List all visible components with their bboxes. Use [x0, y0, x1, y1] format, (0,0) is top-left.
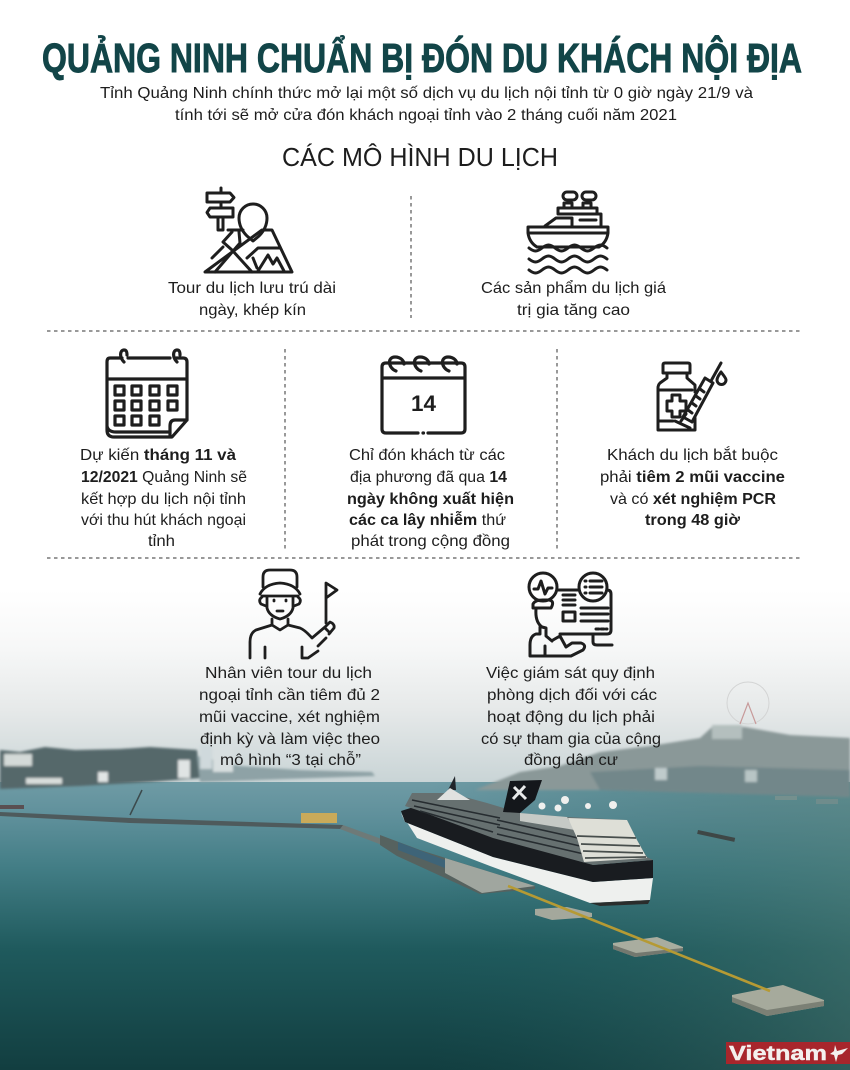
section heading: CÁC MÔ HÌNH DU LỊCH [282, 142, 558, 172]
text: high value products: trị gia tăng cao [517, 302, 630, 319]
dock [380, 835, 535, 894]
subtitle: Tỉnh Quảng Ninh chính thức mở lại một số dịch vụ du lịch nội tỉnh từ 0 giờ ngày 21/9 và [100, 85, 753, 102]
text: monitoring: có sự tham gia của cộng [481, 731, 661, 748]
text: tour staff: mũi vaccine, xét nghiệm [199, 709, 380, 726]
text: high value products [481, 279, 666, 319]
text: long-stay tour: Tour du lịch lưu trú dài [168, 280, 336, 297]
left pier [0, 812, 343, 829]
text: tour staff: định kỳ và làm việc theo [200, 731, 380, 748]
text: tour staff [199, 665, 380, 769]
text: 14 days condition: phát trong cộng đồng [351, 533, 510, 550]
text: 14 days condition: Chỉ đón khách từ các [349, 447, 505, 464]
text: 14 days condition: ngày không xuất hiện [347, 491, 514, 508]
text: long-stay tour: ngày, khép kín [199, 302, 306, 319]
panel: tour staff [199, 570, 380, 769]
text: November and December plan [80, 447, 247, 550]
text: vaccine requirement: phải tiêm 2 mũi vaccine [600, 469, 785, 486]
text: 14 days condition: các ca lây nhiễm thứ [349, 510, 506, 529]
logo: Vietnam+: Vietnam [729, 1043, 827, 1065]
text: November and December plan: với thu hút khách ngoại [81, 512, 246, 529]
panel: vaccine requirement [600, 363, 785, 529]
icon: vaccine bottle and syringe [658, 363, 726, 430]
text: monitoring: Việc giám sát quy định [486, 665, 655, 682]
icon: cruise ship on waves [528, 192, 608, 273]
text: November and December plan: tỉnh [148, 533, 175, 550]
subtitle: tính tới sẽ mở cửa đón khách ngoại tỉnh vào 2 tháng cuối năm 2021 [175, 107, 677, 124]
panel: 14 days condition [347, 357, 514, 550]
panel: November and December plan [80, 350, 247, 550]
panel: monitoring [481, 573, 661, 769]
text: vaccine requirement: và có xét nghiệm PCR [610, 491, 776, 508]
text: November and December plan: Dự kiến tháng 11 và [80, 447, 236, 464]
text: tour staff: mô hình “3 tại chỗ” [220, 750, 361, 769]
ship hull [401, 813, 653, 903]
panel: long-stay tour [168, 188, 336, 319]
text: 14 days condition [347, 447, 514, 550]
icon: map with signpost and pin [205, 188, 292, 272]
text: November and December plan: 12/2021 Quảng Ninh sẽ [81, 469, 247, 486]
text: long-stay tour [168, 280, 336, 319]
text: 14 days condition: địa phương đã qua 14 [350, 469, 507, 486]
text: tour staff: Nhân viên tour du lịch [205, 665, 372, 682]
text: monitoring: phòng dịch đối với các [487, 687, 657, 704]
text: vaccine requirement: Khách du lịch bắt buộc [607, 445, 778, 464]
background photo: Ha Long bay with cruise ship [0, 590, 850, 1070]
logo: Vietnam+ [726, 1042, 850, 1065]
text: monitoring: đồng dân cư [524, 752, 618, 769]
ship dark band [401, 805, 653, 882]
ship superstructure [405, 793, 653, 865]
panel: high value products [481, 192, 666, 319]
text: tour staff: ngoại tỉnh cần tiêm đủ 2 [199, 687, 380, 704]
icon: tour guide with flag [250, 570, 337, 658]
text: monitoring: hoạt động du lịch phải [487, 709, 655, 726]
platforms and walkway [535, 907, 592, 920]
icon: person at monitor with charts [529, 573, 612, 656]
text: monitoring [481, 665, 661, 769]
text: high value products: Các sản phẩm du lịch giá [481, 279, 666, 297]
ship domes [561, 796, 569, 804]
text: vaccine requirement: trong 48 giờ [645, 512, 741, 529]
text: November and December plan: kết hợp du lịch nội tỉnh [81, 491, 246, 508]
text: vaccine requirement [600, 445, 785, 529]
icon: wall calendar [107, 350, 187, 437]
text: icon number: 14 [411, 391, 437, 416]
ship funnel [503, 780, 542, 813]
icon: calendar showing 14 [382, 357, 465, 433]
subtitle [100, 85, 753, 124]
